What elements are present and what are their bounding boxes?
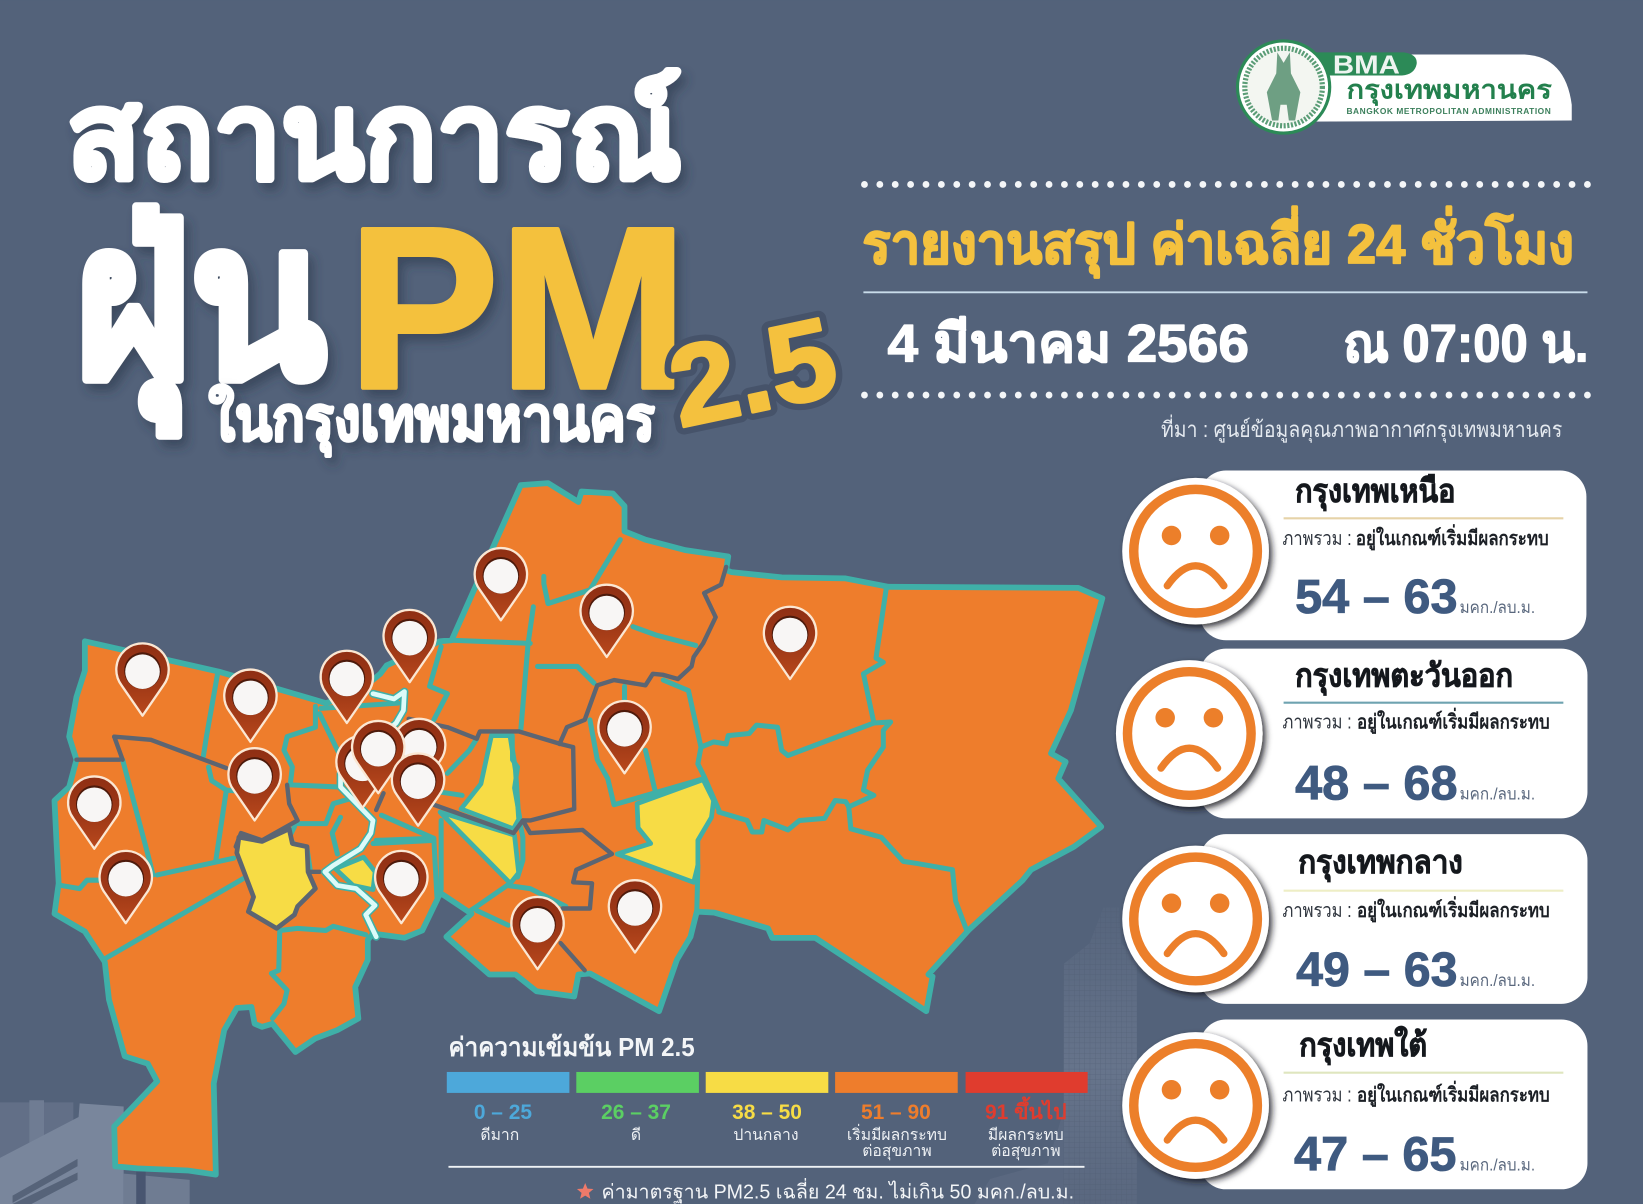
south overview: ภาพรวม : (1283, 1084, 1352, 1106)
report header block (862, 184, 1589, 443)
legend item: starting to affect health: 51 – 90 (861, 1101, 931, 1124)
map: yellow district with dark outline (237, 829, 315, 928)
legend item: good: ดี (631, 1126, 641, 1144)
background: tower bottom right (974, 907, 1137, 1204)
logo: English name: BANGKOK METROPOLITAN ADMINISTRATION (1346, 106, 1551, 116)
east overview: ภาพรวม : (1283, 711, 1352, 733)
legend (447, 1032, 1088, 1204)
map: dark zone boundaries (76, 567, 726, 970)
icon: sad face east (1116, 660, 1263, 807)
legend title: ค่าความเข้มข้น PM 2.5 (448, 1032, 695, 1062)
north unit: มคก./ลบ.ม. (1460, 598, 1535, 617)
east unit: มคก./ลบ.ม. (1460, 785, 1535, 804)
standard note: ค่ามาตรฐาน PM2.5 เฉลี่ย 24 ชม. ไม่เกิน 50 มคก./ลบ.ม. (601, 1178, 1074, 1204)
background: buildings bottom left (0, 1100, 190, 1204)
east status: อยู่ในเกณฑ์เริ่มมีผลกระทบ (1357, 706, 1550, 735)
logo: Thai name: กรุงเทพมหานคร (1346, 75, 1552, 107)
BMA logo (1237, 41, 1572, 133)
legend item: very good: ดีมาก (480, 1126, 519, 1144)
panel: north Bangkok (1122, 470, 1586, 640)
legend item: starting to affect health (835, 1072, 958, 1161)
legend item: moderate (706, 1072, 828, 1144)
icon: sad face north (1122, 478, 1269, 625)
legend item: affects health (966, 1072, 1088, 1161)
title block (67, 68, 847, 457)
logo: emblem (1237, 41, 1330, 133)
title: PM: PM (348, 179, 687, 437)
north heading: กรุงเทพเหนือ (1295, 473, 1455, 512)
map: teal district boundaries (61, 540, 967, 1019)
legend item: affects health: ต่อสุขภาพ (991, 1143, 1061, 1161)
title: subscript 2.5: 2.5 (659, 293, 847, 451)
title: subscript 2.5: 2.5 (659, 293, 847, 451)
central unit: มคก./ลบ.ม. (1460, 971, 1535, 990)
icon: star (577, 1183, 593, 1199)
legend item: very good (447, 1072, 569, 1144)
east value: 48 – 68 (1295, 757, 1458, 811)
title line 2: dust word: ฝุ่น (74, 182, 326, 436)
north value: 54 – 63 (1295, 570, 1458, 624)
title line 3: ในกรุงเทพมหานคร (209, 384, 655, 457)
report time: ณ 07:00 น. (1343, 316, 1589, 374)
north overview: ภาพรวม : (1283, 528, 1352, 550)
south status: อยู่ในเกณฑ์เริ่มมีผลกระทบ (1357, 1079, 1550, 1108)
legend item: affects health: มีผลกระทบ (988, 1126, 1064, 1144)
map: base area (54, 483, 1102, 1175)
panel: south Bangkok (1122, 1020, 1587, 1189)
south value: 47 – 65 (1294, 1127, 1456, 1181)
legend item: moderate: 38 – 50 (732, 1101, 802, 1124)
central heading: กรุงเทพกลาง (1298, 844, 1463, 883)
south unit: มคก./ลบ.ม. (1460, 1155, 1535, 1174)
legend item: affects health: 91 ขึ้นไป (985, 1096, 1067, 1124)
central overview: ภาพรวม : (1283, 900, 1352, 922)
map of Bangkok districts (54, 483, 1102, 1175)
map: location pins (68, 548, 816, 969)
report date: 4 มีนาคม 2566 (888, 316, 1249, 374)
south heading: กรุงเทพใต้ (1299, 1026, 1427, 1066)
central status: อยู่ในเกณฑ์เริ่มมีผลกระทบ (1357, 895, 1550, 924)
east heading: กรุงเทพตะวันออก (1295, 657, 1513, 696)
legend item: moderate: ปานกลาง (733, 1127, 799, 1144)
title line 1: สถานการณ์ (67, 68, 681, 204)
legend item: starting to affect health: ต่อสุขภาพ (862, 1143, 932, 1161)
panel: east Bangkok (1116, 649, 1587, 818)
legend item: good (576, 1072, 699, 1144)
legend item: starting to affect health: เริ่มมีผลกระทบ (847, 1123, 947, 1144)
central value: 49 – 63 (1296, 943, 1458, 997)
map: yellow districts (335, 736, 714, 890)
logo: green tab (1299, 52, 1417, 75)
legend item: good: 26 – 37 (601, 1101, 671, 1124)
map: river (325, 692, 404, 937)
icon: sad face south (1122, 1032, 1269, 1179)
logo: BMA text: BMA (1333, 49, 1400, 79)
report heading: รายงานสรุป ค่าเฉลี่ย 24 ชั่วโมง (862, 206, 1574, 279)
legend item: very good: 0 – 25 (474, 1101, 532, 1124)
data source: ที่มา : ศูนย์ข้อมูลคุณภาพอากาศกรุงเทพมหานคร (1161, 414, 1562, 443)
panel: central Bangkok (1122, 834, 1587, 1004)
icon: sad face central (1122, 846, 1269, 992)
north status: อยู่ในเกณฑ์เริ่มมีผลกระทบ (1356, 523, 1549, 552)
